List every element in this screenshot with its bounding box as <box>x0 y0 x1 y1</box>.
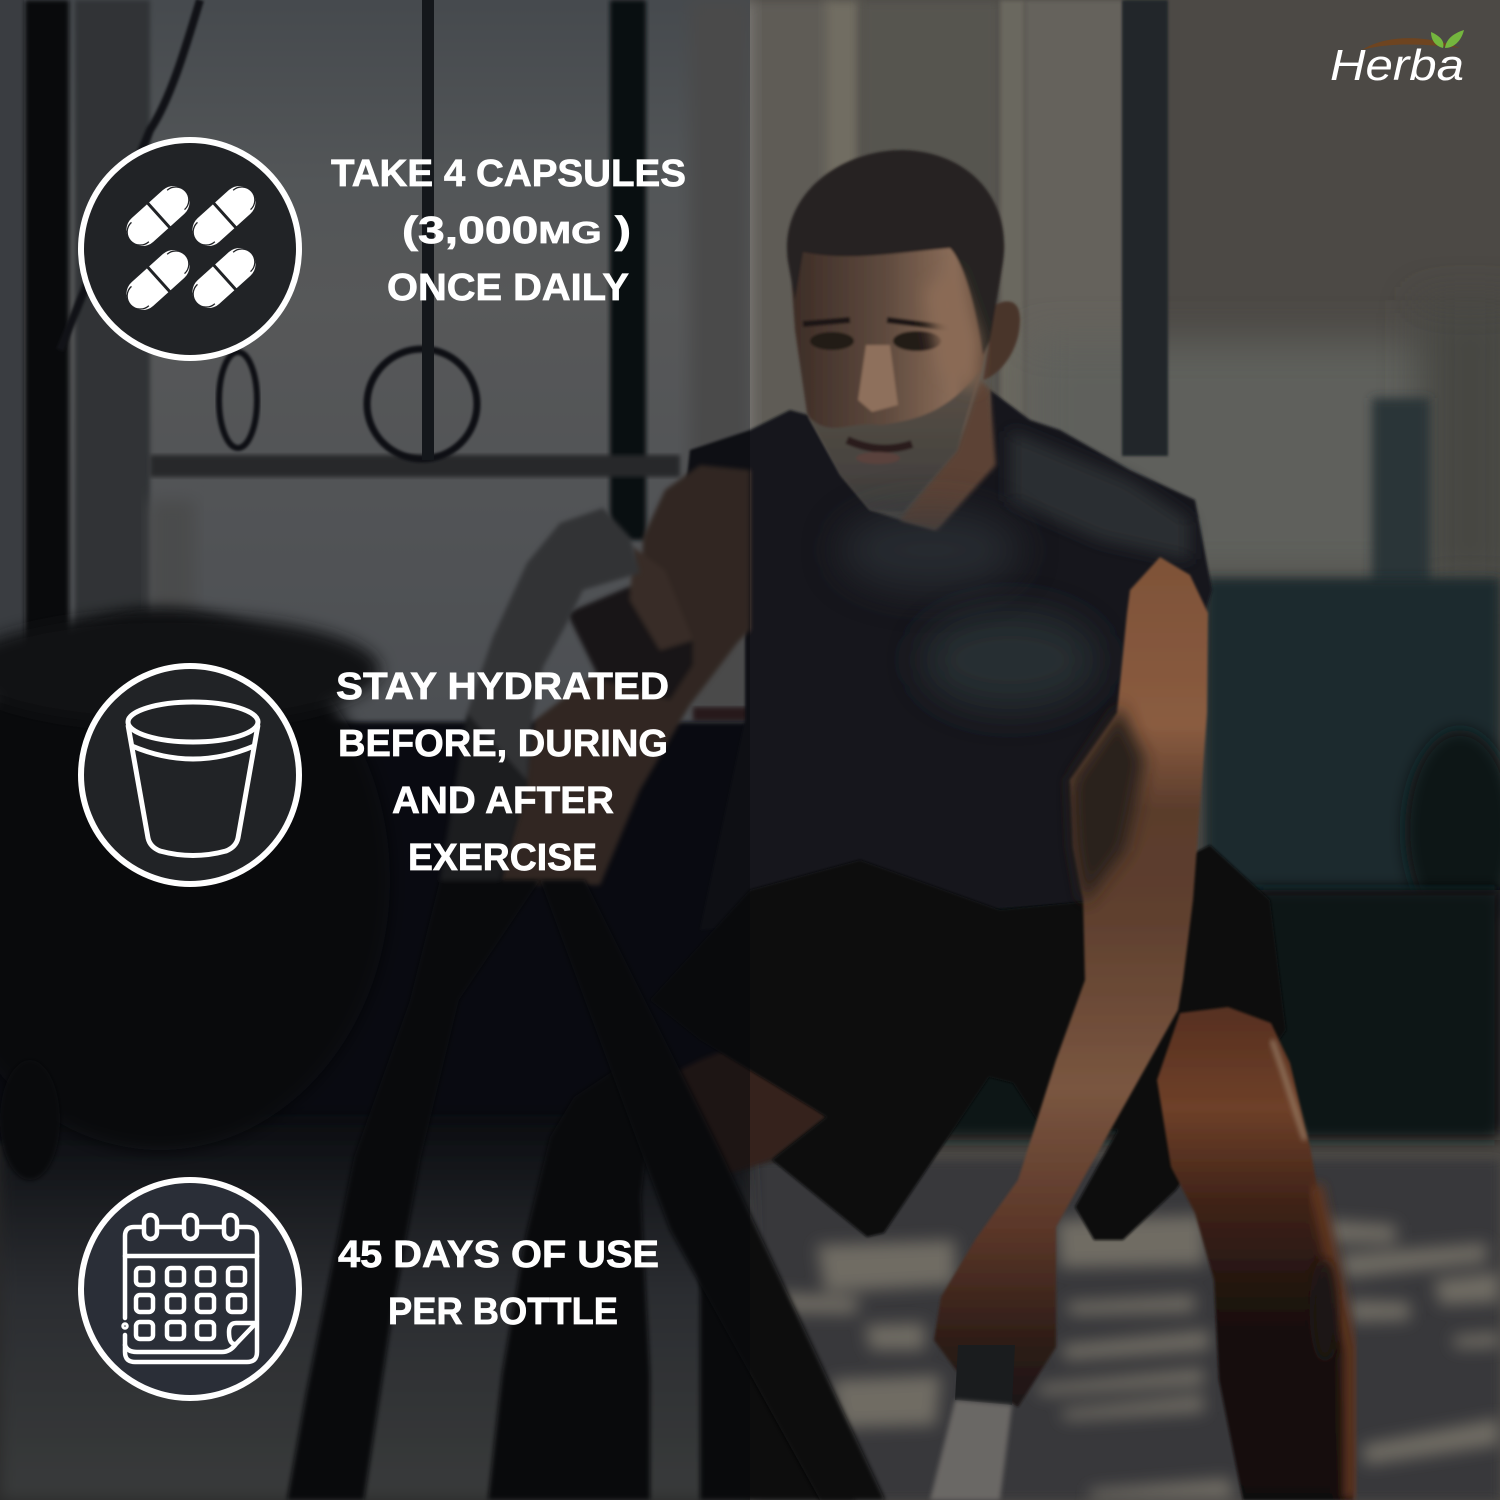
logo: Herba <box>1330 30 1464 90</box>
capsule 4 <box>184 240 264 316</box>
text: hydration advice: BEFORE, DURING <box>338 723 668 765</box>
text: days of use <box>338 1234 659 1333</box>
face <box>790 200 1000 512</box>
mouth <box>847 440 912 449</box>
rear leg <box>488 1040 855 1500</box>
left rope <box>287 508 885 1500</box>
capsule 1 <box>118 178 198 254</box>
shirt shoulder highlights <box>920 430 1190 710</box>
shirt and torso <box>680 390 1212 930</box>
text: hydration advice: STAY HYDRATED <box>336 666 669 708</box>
text: capsule dosage: TAKE 4 CAPSULES <box>331 153 686 195</box>
text: days of use: PER BOTTLE <box>388 1291 618 1333</box>
beard <box>807 370 980 512</box>
left side dark overlay panel <box>0 0 750 1500</box>
icon: calendar <box>81 1180 299 1398</box>
text: capsule dosage <box>331 153 686 309</box>
front leg <box>1157 1007 1353 1500</box>
text: capsule dosage: (3,000 MG ) <box>402 210 631 252</box>
logo swoosh <box>1362 38 1460 50</box>
logo wordmark: Herba <box>1330 41 1464 90</box>
capsule 2 <box>184 178 264 254</box>
front rope <box>930 1345 1015 1500</box>
text: hydration advice <box>336 666 669 879</box>
icon: water cup <box>81 666 299 884</box>
smoke haze <box>840 510 1020 590</box>
back arm and hand <box>500 465 750 885</box>
shorts <box>650 845 1286 1240</box>
lit cheek <box>925 270 980 390</box>
text: capsule dosage: ONCE DAILY <box>387 267 629 309</box>
ear <box>983 301 1020 380</box>
brows <box>803 320 950 328</box>
neck <box>900 380 996 530</box>
front arm and hand <box>934 557 1208 1407</box>
nose <box>858 345 898 412</box>
floor light stripes <box>760 1215 1500 1500</box>
text: hydration advice: EXERCISE <box>408 837 597 879</box>
logo leaves <box>1431 30 1464 48</box>
left side gym background <box>0 0 755 1500</box>
head <box>787 150 1020 512</box>
icon: capsules <box>81 140 299 358</box>
hair <box>787 150 1004 355</box>
text: hydration advice: AND AFTER <box>392 780 614 822</box>
eyes <box>810 332 854 350</box>
athlete <box>287 150 1353 1500</box>
text: days of use: 45 DAYS OF USE <box>338 1234 659 1276</box>
capsule 3 <box>118 242 198 318</box>
